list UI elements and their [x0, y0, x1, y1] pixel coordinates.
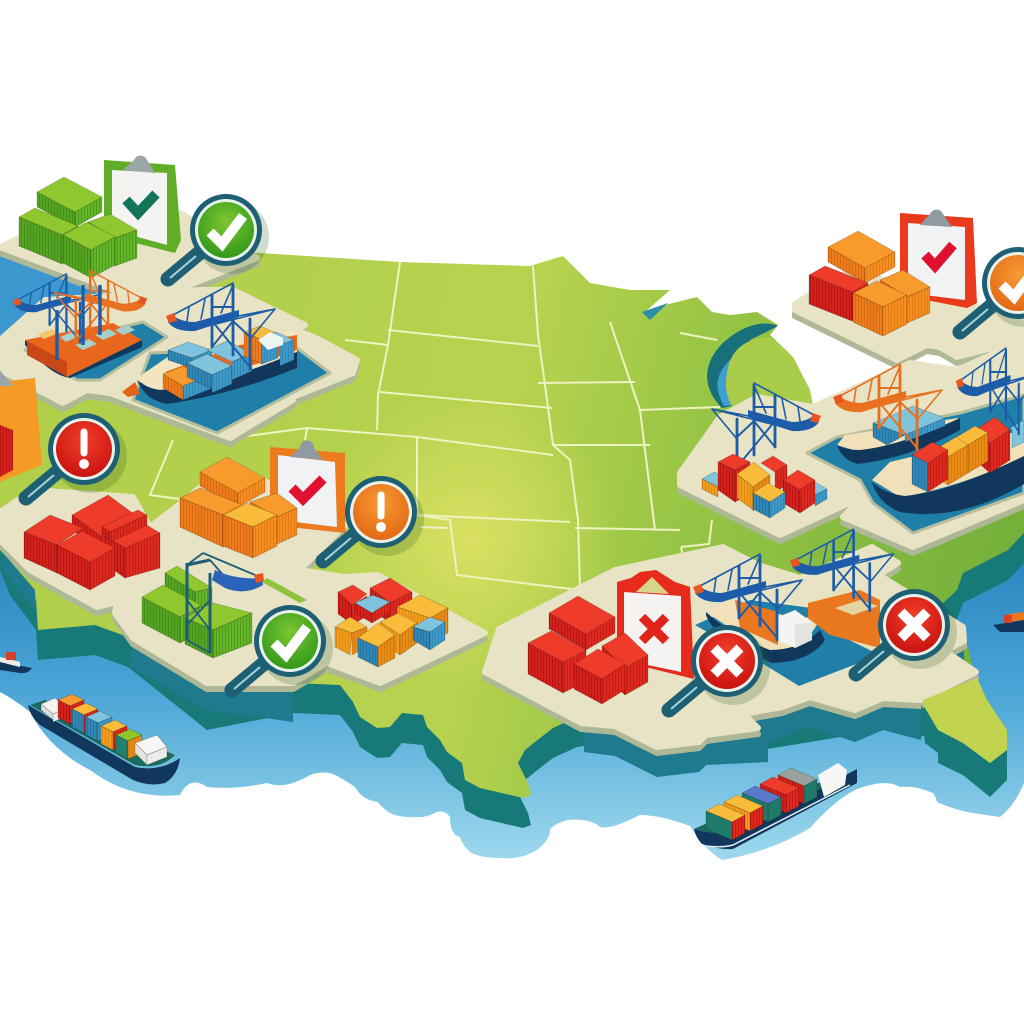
container stack: red and orange north-east — [809, 231, 930, 336]
florida — [921, 678, 1007, 797]
clipboard: orange center — [270, 440, 345, 533]
tile: east port complex — [680, 340, 1024, 553]
container stack: green north-west — [19, 177, 137, 278]
tile extrusion: west gulf coast — [0, 555, 293, 722]
tile extrusion: south-east gulf coast — [584, 641, 964, 777]
ship: container ship north-west — [122, 326, 297, 404]
map: land top face — [0, 252, 1024, 798]
barge: south-east orange containers — [808, 585, 880, 655]
crane: teal on green containers — [187, 553, 264, 653]
green strip — [262, 578, 307, 603]
container stack: green with crane — [142, 566, 252, 658]
ship: east large container ship — [872, 417, 1024, 514]
crane: orange east — [833, 364, 942, 450]
tile: north-west port — [0, 290, 357, 444]
magnifier: red alert — [26, 413, 127, 498]
ocean — [0, 248, 1024, 860]
magnifier: green check — [168, 194, 269, 279]
magnifier: green check south — [232, 605, 333, 690]
magnifier: orange check — [960, 247, 1024, 332]
container stack: multicolour south — [335, 578, 448, 667]
container stack: multicolour east — [702, 454, 827, 518]
crane: blue east — [956, 348, 1024, 434]
ship: bottom-left container ship — [28, 694, 180, 784]
container stack: orange center — [180, 457, 297, 558]
container stack: red west — [24, 495, 160, 590]
tile: west platform — [0, 462, 485, 689]
crane: blue north-west ship — [166, 283, 275, 369]
magnifier: orange alert — [323, 476, 424, 561]
ship: bottom-right container ship — [694, 763, 857, 849]
container stack: red south-east — [528, 596, 648, 704]
crane: blue east platform — [712, 383, 821, 469]
tile: north-east inspection platform — [795, 270, 1024, 366]
crane: blue and orange north-west — [54, 271, 147, 344]
ship: orange barge with cranes — [25, 323, 142, 378]
ship: east blue container ship — [837, 406, 960, 464]
crane: blue south-east left — [693, 554, 802, 640]
water basins — [25, 322, 167, 380]
south-east water basin — [695, 600, 880, 686]
crane: blue west — [13, 274, 100, 343]
ship: south-east container ship — [706, 600, 827, 663]
tile: north-west inspection platform — [0, 213, 257, 301]
magnifier: red cross left — [669, 625, 770, 710]
crane: blue south-east right — [790, 529, 894, 611]
clipboard: green approved — [104, 156, 181, 253]
east water basin — [807, 395, 1024, 533]
tile: south-east port complex — [485, 547, 976, 753]
magnifier: red cross right — [856, 589, 957, 674]
ocean upper-left tint — [0, 248, 130, 420]
ship: small left — [0, 652, 32, 673]
ship: small right — [993, 612, 1024, 632]
crane: blue post pair — [57, 285, 100, 360]
map: land extrusion — [0, 500, 1024, 828]
clipboard: orange west (partial) — [0, 370, 42, 482]
clipboard: red north-east — [900, 210, 977, 308]
state borders — [150, 262, 720, 590]
lake michigan — [642, 303, 813, 412]
clipboard: red rejected — [617, 570, 694, 679]
